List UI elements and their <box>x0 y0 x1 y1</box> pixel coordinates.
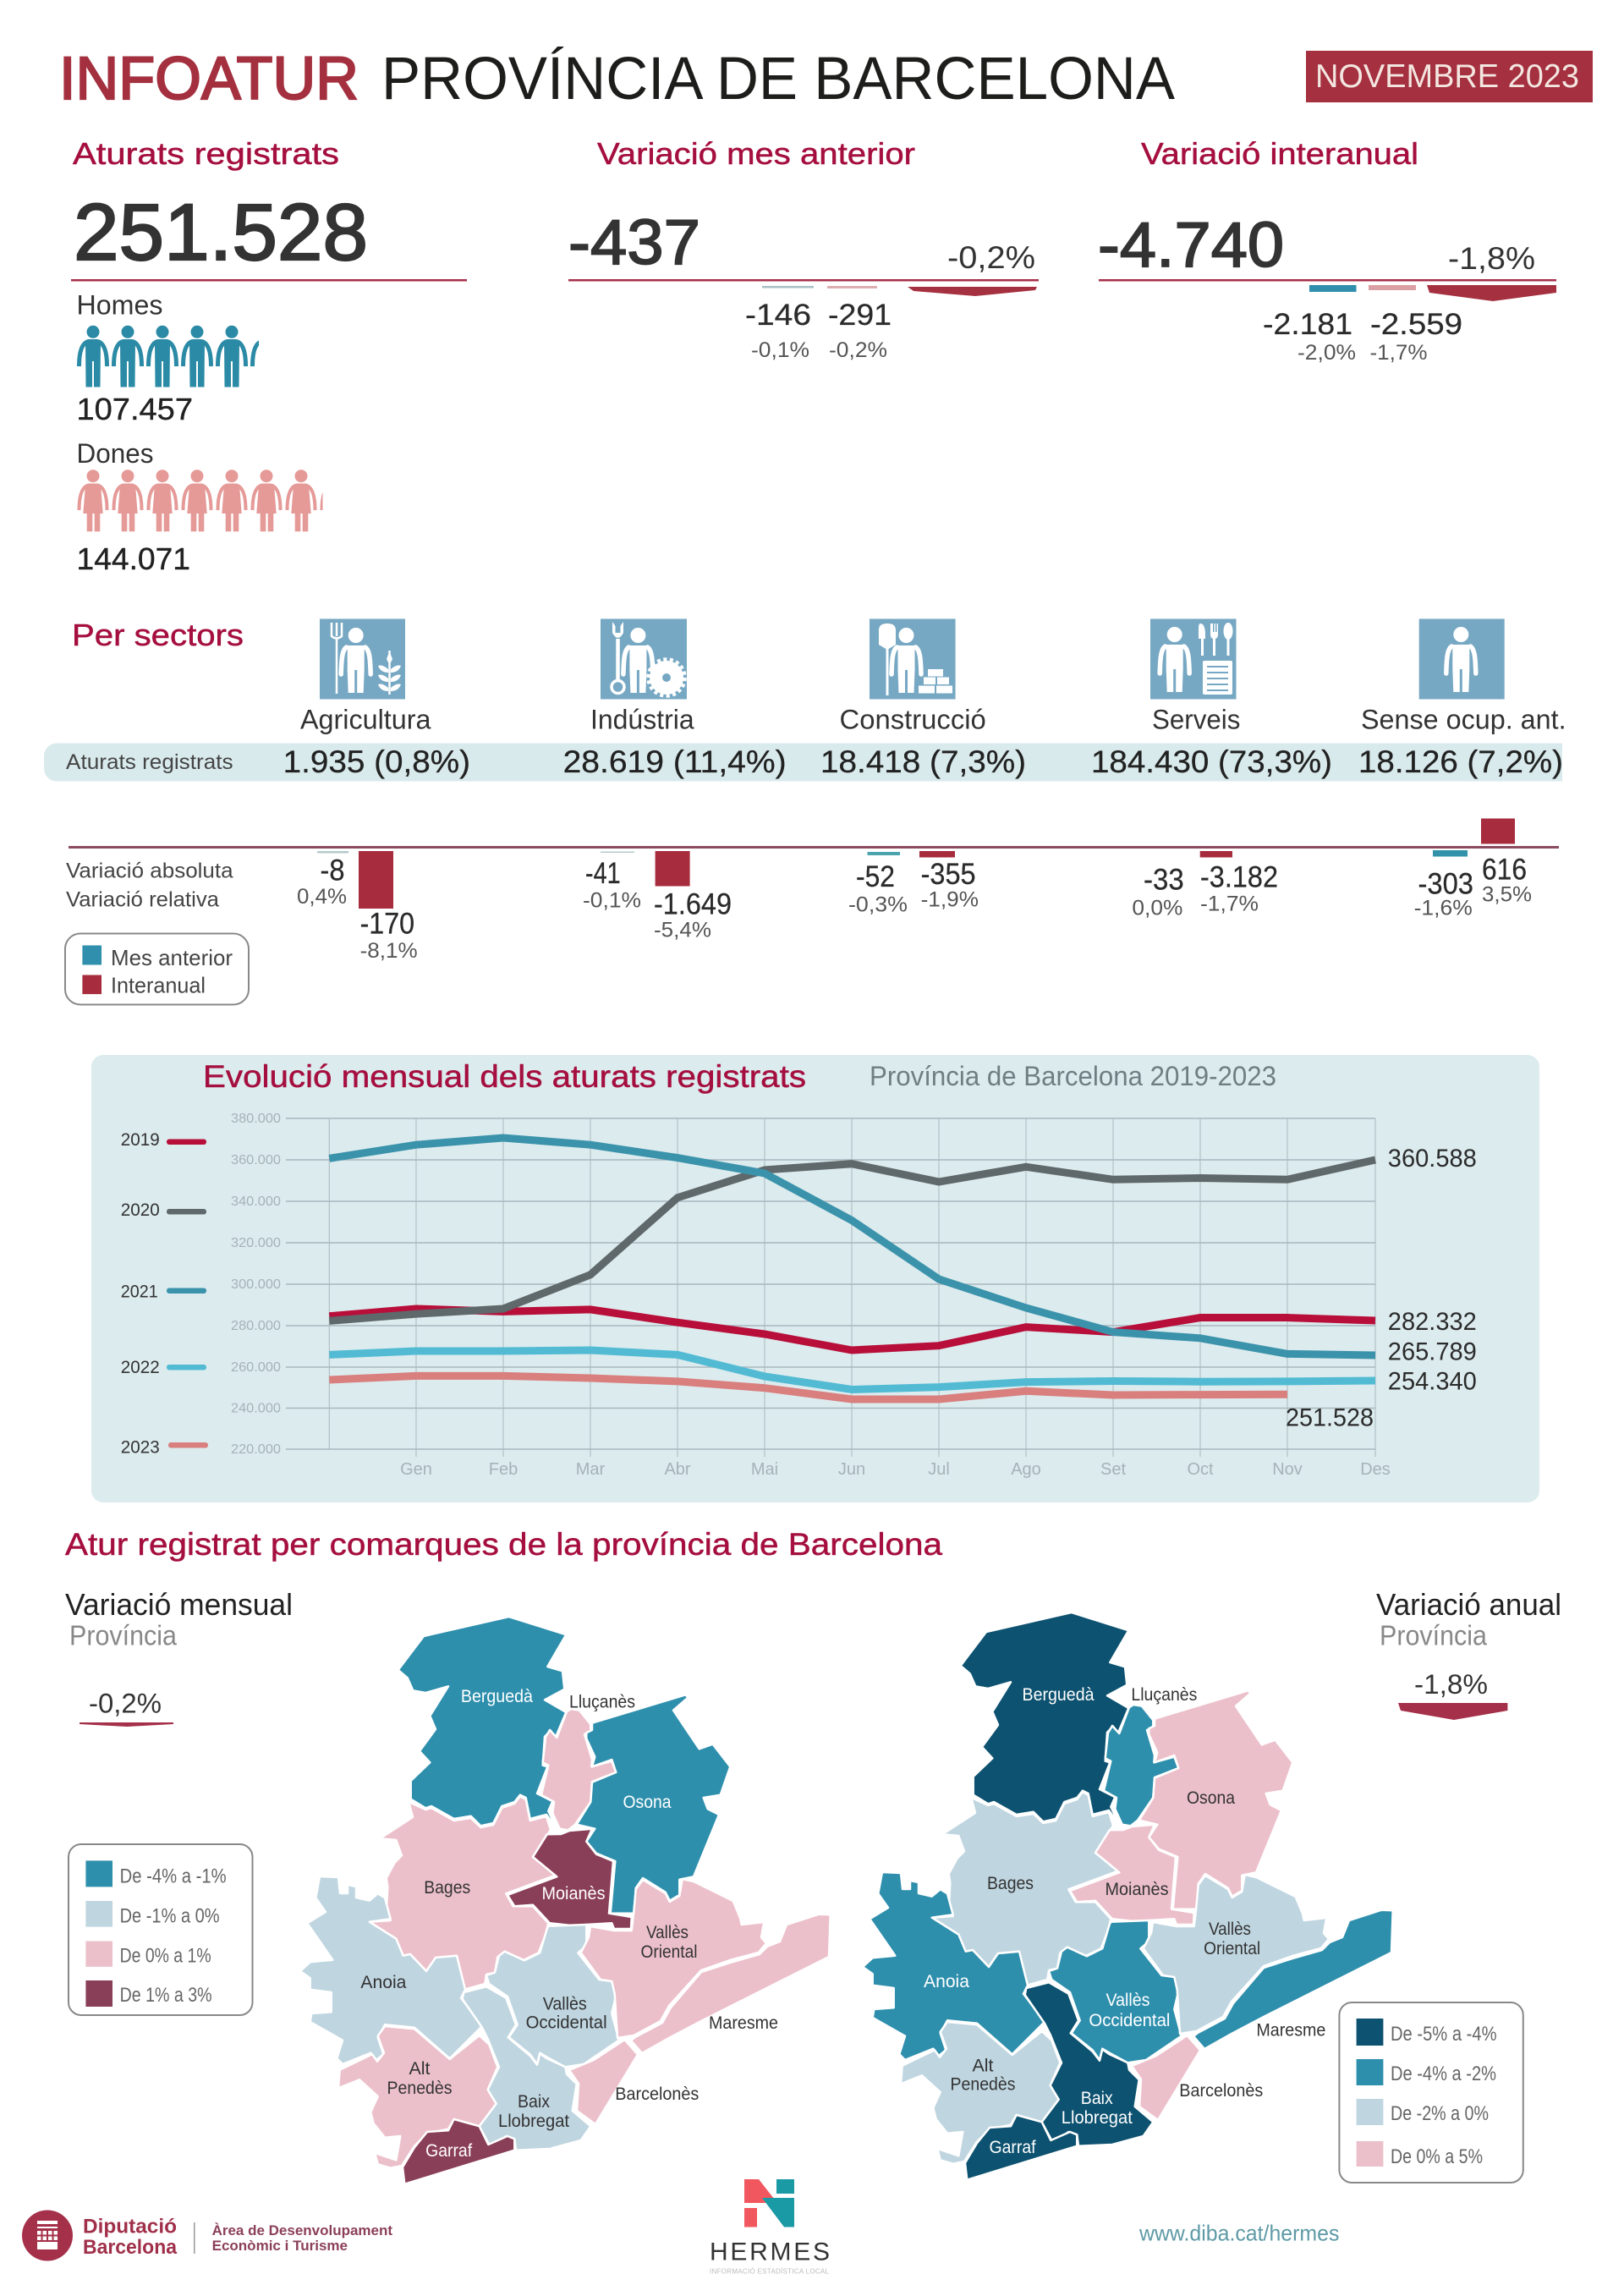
map labels: variació anual: Penedès <box>951 2074 1015 2095</box>
variation: sense ocupació anterior: 616 <box>1482 853 1527 887</box>
chart legend: 2021 <box>121 1283 158 1302</box>
map labels: variació anual: Baix <box>1081 2089 1113 2108</box>
line chart <box>231 1112 1391 1479</box>
line chart: Feb <box>489 1460 518 1479</box>
map labels: variació anual: Vallès <box>1209 1920 1251 1939</box>
panel: variació mensual <box>65 1587 831 2184</box>
map labels: variació mensual: Osona <box>623 1793 672 1812</box>
map labels: variació mensual: Vallès <box>646 1923 689 1942</box>
variation: agricultura: -8,1% <box>360 939 418 963</box>
map labels: variació mensual: Baix <box>518 2092 550 2112</box>
sector names: Serveis <box>1152 704 1240 734</box>
sector names: Sense ocup. ant. <box>1361 704 1566 734</box>
icon: serveis <box>1150 619 1237 699</box>
chart legend <box>121 1130 208 1457</box>
map labels: variació anual: Llobregat <box>1062 2108 1133 2128</box>
heading: variació interanual: Variació interanual <box>1141 136 1418 171</box>
map labels: variació mensual: Maresme <box>709 2013 778 2033</box>
heading: comarques: Atur registrat per comarques de la província de Barcelona <box>65 1527 942 1562</box>
arrow down <box>908 287 1037 296</box>
map labels: variació mensual: Oriental <box>641 1942 697 1962</box>
variation: agricultura: -170 <box>360 907 414 941</box>
map labels: variació anual: Barcelonès <box>1179 2081 1263 2101</box>
values: -2.181 <box>1263 308 1352 341</box>
chart heading: Evolució mensual dels aturats registrats <box>203 1059 806 1094</box>
line chart: 240.000 <box>231 1401 281 1416</box>
icon: construcció <box>870 619 956 699</box>
line chart: 340.000 <box>231 1195 281 1209</box>
logo: Hermes <box>710 2179 830 2276</box>
map labels: variació mensual: Berguedà <box>461 1687 533 1706</box>
map labels: variació mensual: Occidental <box>526 2013 607 2033</box>
map labels: variació mensual: Barcelonès <box>615 2085 699 2104</box>
sector names: Agricultura <box>300 704 431 734</box>
band: aturats registrats per sector: 18.418 (7,3%) <box>820 744 1026 779</box>
end values: 254.340 <box>1388 1367 1477 1396</box>
variation: indústria: -41 <box>585 857 621 890</box>
variation: sense ocupació anterior: -303 <box>1418 868 1473 900</box>
band: aturats registrats per sector: 28.619 (11,4%) <box>563 744 787 779</box>
variation: indústria: -5,4% <box>654 919 711 942</box>
values <box>745 299 892 362</box>
map labels: variació anual: Oriental <box>1204 1939 1260 1958</box>
percent: -1,8% <box>1448 241 1535 276</box>
value: homes: 107.457 <box>76 392 193 426</box>
map labels: variació anual: Alt <box>973 2056 994 2075</box>
label: dones: Dones <box>76 438 154 469</box>
label: variació mensual: Variació mensual <box>65 1587 293 1622</box>
band: aturats registrats per sector <box>44 743 1563 782</box>
icon: indústria <box>601 619 687 699</box>
map labels: variació anual: Vallès <box>1106 1991 1150 2010</box>
map labels: variació anual: Berguedà <box>1022 1685 1095 1705</box>
logo: Hermes: HERMES <box>710 2238 830 2266</box>
sector names: Construcció <box>839 704 986 734</box>
total figure: -437 <box>568 206 700 277</box>
variation: serveis: 0,0% <box>1132 897 1182 920</box>
variation: sense ocupació anterior: 3,5% <box>1482 883 1532 907</box>
percent: -0,2% <box>947 240 1035 275</box>
end values: 282.332 <box>1388 1308 1477 1336</box>
chart legend: 2023 <box>121 1438 160 1457</box>
title: INFOATUR <box>59 46 359 113</box>
map labels: variació mensual: Moianès <box>541 1884 606 1903</box>
values: -1,7% <box>1370 341 1428 365</box>
value: dones: 144.071 <box>76 541 190 576</box>
line chart: 320.000 <box>231 1236 281 1250</box>
values: -0,2% <box>829 338 887 362</box>
map labels: variació anual: Osona <box>1187 1788 1235 1808</box>
variation: agricultura: -8 <box>320 854 345 887</box>
legend: mensual: De 1% a 3% <box>120 1984 212 2007</box>
line chart: 220.000 <box>231 1442 281 1457</box>
band: aturats registrats per sector: 184.430 (73,3%) <box>1091 744 1332 779</box>
panel: per sectors <box>44 618 1566 1005</box>
label: variació anual: Variació anual <box>1376 1587 1561 1622</box>
map labels: variació mensual: Alt <box>409 2059 431 2079</box>
band: aturats registrats per sector: 1.935 (0,8%) <box>283 744 470 779</box>
label: província: Província <box>69 1620 178 1651</box>
variation: indústria <box>583 851 732 942</box>
panel: variació mes anterior <box>568 136 1039 362</box>
title <box>59 46 1176 113</box>
legend: anual: De -5% a -4% <box>1391 2023 1497 2046</box>
line chart: Jun <box>838 1460 865 1479</box>
arrow down <box>1398 1703 1507 1720</box>
variation: agricultura: 0,4% <box>297 885 347 909</box>
legend: anual: De -2% a 0% <box>1391 2102 1489 2125</box>
legend: sectors: Mes anterior <box>111 945 233 970</box>
legend: mensual: De -1% a 0% <box>120 1904 220 1927</box>
label: província: Província <box>1380 1620 1488 1651</box>
logo: Hermes: INFORMACIÓ ESTADÍSTICA LOCAL <box>710 2267 830 2276</box>
map labels: variació mensual <box>360 1687 778 2161</box>
title: PROVÍNCIA DE BARCELONA <box>381 46 1176 113</box>
line chart: 280.000 <box>231 1319 281 1333</box>
variation: sense ocupació anterior: -1,6% <box>1414 897 1473 920</box>
line chart: Nov <box>1272 1460 1303 1479</box>
label: homes: Homes <box>76 289 162 320</box>
variation: serveis: -3.182 <box>1200 861 1278 893</box>
chart legend: 2020 <box>121 1200 160 1220</box>
map labels: variació mensual: Bages <box>424 1878 470 1898</box>
heading: variació mes anterior: Variació mes anterior <box>597 136 915 171</box>
line chart: Gen <box>400 1460 432 1479</box>
end values <box>1286 1145 1477 1431</box>
legend: sectors: Interanual <box>111 973 206 998</box>
total figure: -4.740 <box>1098 209 1284 280</box>
logo: Diputació Barcelona: Econòmic i Turisme <box>212 2238 348 2254</box>
variation: serveis <box>1132 851 1278 920</box>
map labels: variació anual: Garraf <box>990 2138 1036 2157</box>
variation: indústria: -1.649 <box>654 888 732 920</box>
row labels: Variació relativa <box>66 888 219 912</box>
icon: women pictogram <box>80 470 350 531</box>
band: aturats registrats per sector: 18.126 (7,2%) <box>1358 744 1563 779</box>
website link: www.diba.cat/hermes <box>1138 2220 1339 2245</box>
line chart: Abr <box>664 1460 691 1479</box>
panel: evolució mensual <box>91 1055 1539 1502</box>
map labels: variació anual: Maresme <box>1256 2020 1325 2040</box>
logo: Diputació Barcelona: Diputació <box>83 2216 177 2238</box>
panel: aturats registrats <box>71 136 467 576</box>
logo: Diputació Barcelona: Àrea de Desenvolupament <box>212 2222 392 2238</box>
line chart: Oct <box>1187 1460 1214 1479</box>
line chart: Jul <box>928 1460 950 1479</box>
sector names <box>300 704 1566 734</box>
variation: construcció <box>848 851 979 916</box>
line chart: Mar <box>576 1460 606 1479</box>
values: -291 <box>828 299 892 332</box>
chart legend: 2022 <box>121 1358 160 1377</box>
map labels: variació mensual: Vallès <box>543 1995 587 2013</box>
variation: agricultura <box>297 851 418 963</box>
map labels: variació mensual: Anoia <box>360 1973 407 1992</box>
panel: variació interanual <box>1098 136 1556 365</box>
map labels: variació anual: Moianès <box>1105 1880 1169 1899</box>
line chart: 380.000 <box>231 1112 281 1126</box>
value: -0,2% <box>89 1689 162 1719</box>
row labels <box>66 860 233 912</box>
date badge: NOVEMBRE 2023 <box>1315 58 1579 95</box>
variation: sense ocupació anterior <box>1414 819 1532 920</box>
value: -1,8% <box>1414 1669 1488 1700</box>
arrow down <box>1427 285 1556 301</box>
sector names: Indústria <box>590 704 694 734</box>
legend: mensual: De 0% a 1% <box>120 1944 211 1968</box>
map labels: variació mensual: Garraf <box>425 2141 472 2161</box>
map labels: variació mensual: Penedès <box>387 2079 452 2098</box>
variation rows <box>65 819 1559 1005</box>
map labels: variació anual: Lluçanès <box>1131 1685 1197 1705</box>
variation: construcció: -0,3% <box>848 893 908 916</box>
variation: serveis: -1,7% <box>1200 892 1259 915</box>
values: -0,1% <box>751 338 809 362</box>
line chart: Mai <box>751 1460 778 1479</box>
legend: anual <box>1339 2002 1523 2183</box>
heading: per sectors: Per sectors <box>72 618 244 652</box>
chart legend: 2019 <box>121 1130 160 1150</box>
band: aturats registrats per sector: Aturats registrats <box>66 750 233 774</box>
legend: sectors <box>65 934 249 1005</box>
logo: Diputació Barcelona <box>22 2210 392 2260</box>
chart subheading: Província de Barcelona 2019-2023 <box>870 1061 1276 1091</box>
variation: indústria: -0,1% <box>583 888 641 912</box>
end values: 265.789 <box>1388 1338 1477 1365</box>
values <box>1263 308 1462 365</box>
line chart: Ago <box>1011 1460 1041 1479</box>
line chart: 300.000 <box>231 1277 281 1292</box>
end values: 251.528 <box>1286 1403 1374 1431</box>
bars <box>1309 285 1416 292</box>
legend: anual: De -4% a -2% <box>1391 2063 1496 2085</box>
legend: mensual <box>69 1844 252 2015</box>
map labels: variació anual: Bages <box>987 1874 1034 1893</box>
map labels: variació anual <box>924 1685 1325 2157</box>
logo: Diputació Barcelona: Barcelona <box>83 2236 178 2259</box>
total figure: 251.528 <box>74 188 368 277</box>
values: -2.559 <box>1370 308 1462 341</box>
legend: mensual: De -4% a -1% <box>120 1865 227 1888</box>
line chart: Set <box>1100 1460 1126 1479</box>
map: variació mensual <box>300 1617 831 2184</box>
panel: variació anual <box>863 1587 1561 2183</box>
line chart: 260.000 <box>231 1360 281 1375</box>
map labels: variació mensual: Lluçanès <box>569 1693 635 1712</box>
variation: construcció: -52 <box>856 860 895 893</box>
map: variació anual <box>863 1612 1393 2180</box>
variation: construcció: -355 <box>921 858 976 891</box>
line chart: 360.000 <box>231 1153 281 1167</box>
map labels: variació mensual: Llobregat <box>498 2112 569 2131</box>
icon: agricultura <box>320 619 405 699</box>
row labels: Variació absoluta <box>66 860 233 883</box>
heading: aturats registrats: Aturats registrats <box>73 136 339 171</box>
values: -146 <box>745 299 811 332</box>
bars <box>762 286 877 288</box>
values: -2,0% <box>1298 341 1356 365</box>
icon: sense ocupació anterior <box>1419 619 1505 699</box>
legend: anual: De 0% a 5% <box>1391 2145 1483 2168</box>
map labels: variació anual: Occidental <box>1089 2011 1170 2030</box>
date badge <box>1306 51 1593 102</box>
line chart: Des <box>1360 1460 1391 1479</box>
map labels: variació anual: Anoia <box>924 1972 969 1991</box>
variation: construcció: -1,9% <box>921 888 979 912</box>
icon: men pictogram <box>80 326 281 387</box>
end values: 360.588 <box>1388 1145 1477 1173</box>
arrow down <box>80 1722 173 1727</box>
variation: serveis: -33 <box>1144 863 1184 897</box>
